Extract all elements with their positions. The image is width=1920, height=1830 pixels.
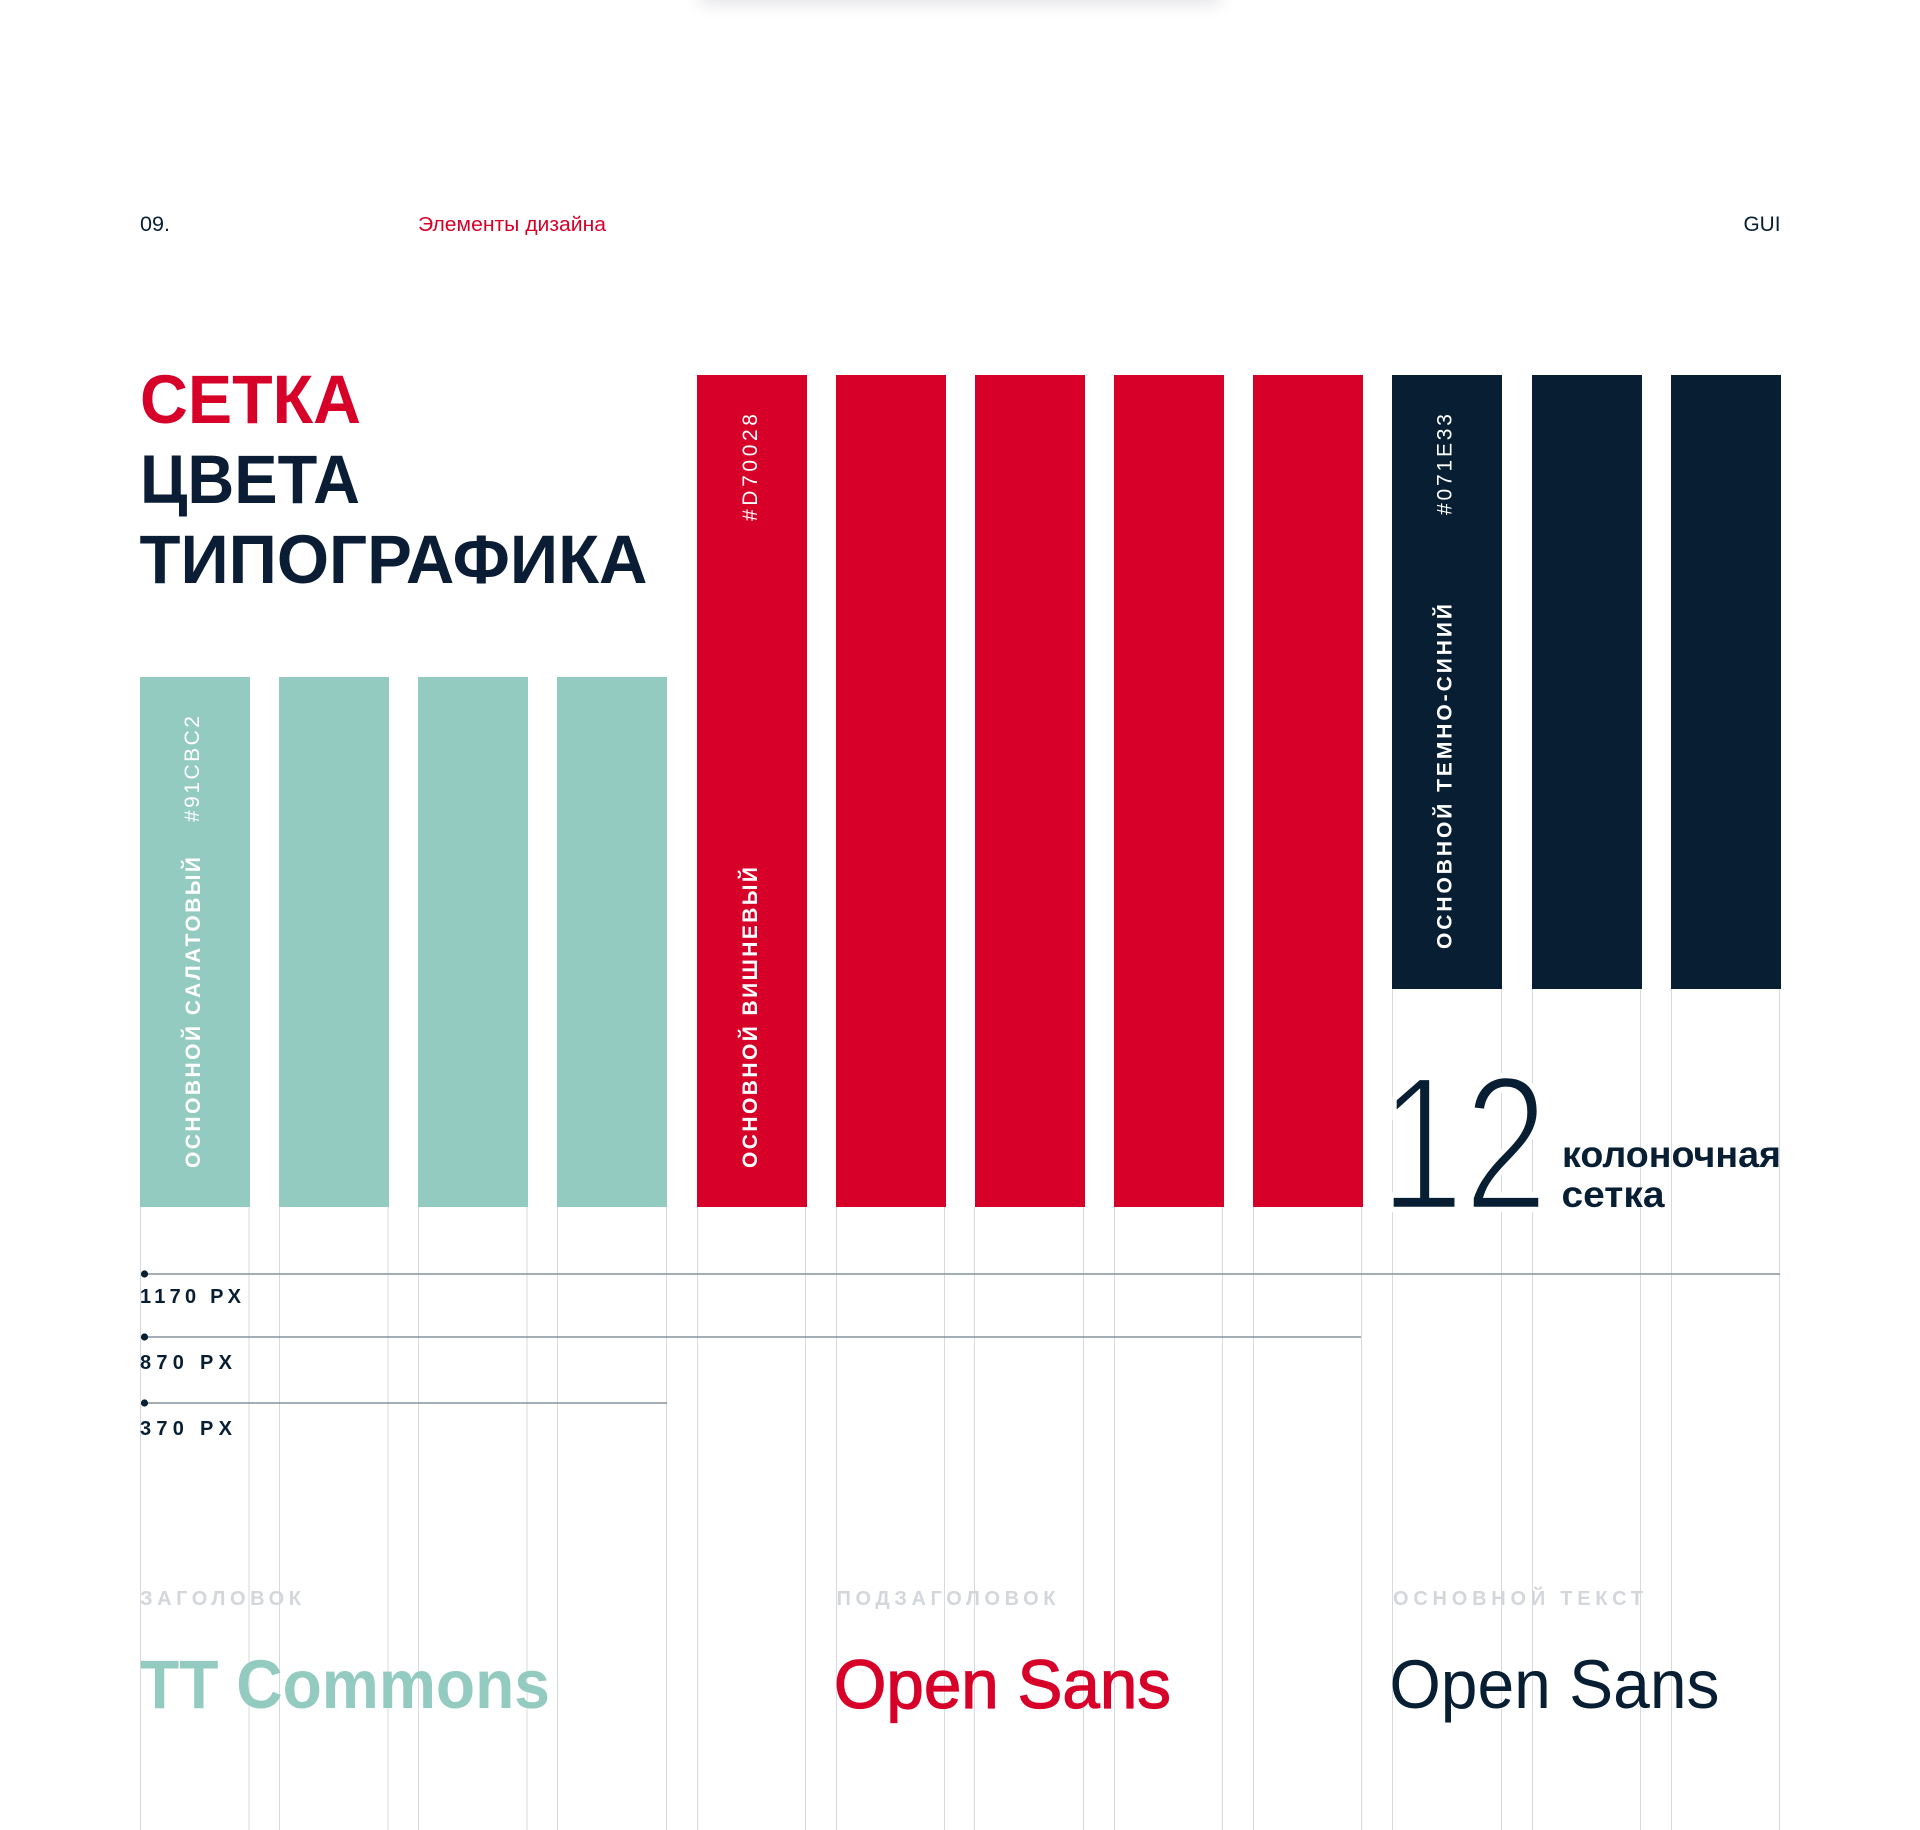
- width line: 1170 px: [140, 1270, 1780, 1308]
- typography: heading font: [140, 1588, 550, 1723]
- typography: heading font: ЗАГОЛОВОК: [140, 1588, 302, 1610]
- header: section number: 09.: [140, 213, 170, 236]
- typography: body font: Open Sans: [1390, 1646, 1720, 1723]
- typography: subheading font: ПОДЗАГОЛОВОК: [836, 1588, 1056, 1610]
- navy colour name: ОСНОВНОЙ ТЕМНО-СИНИЙ: [1432, 604, 1456, 949]
- caption: column grid: сетка: [1562, 1174, 1665, 1215]
- navy hex code: #071E33: [1434, 414, 1456, 515]
- title: СЕТКА: [140, 361, 361, 438]
- caption: column grid: колоночная: [1562, 1134, 1781, 1175]
- title: ТИПОГРАФИКА: [140, 521, 648, 598]
- typography: subheading font: [834, 1588, 1171, 1723]
- typography: heading font: TT Commons: [140, 1646, 550, 1723]
- teal colour name: ОСНОВНОЙ САЛАТОВЫЙ: [181, 857, 205, 1168]
- typography: subheading font: Open Sans: [834, 1646, 1171, 1723]
- width line: 370 px: [140, 1399, 667, 1440]
- title: [140, 361, 648, 598]
- width line: 370 px: 370 PX: [140, 1418, 233, 1440]
- width line: 870 px: [140, 1333, 1361, 1374]
- red hex code: #D70028: [739, 414, 762, 521]
- panel: navy swatch columns: [1392, 375, 1781, 989]
- title: ЦВЕТА: [140, 441, 360, 518]
- big number 12: 12: [1380, 1036, 1548, 1250]
- typography: body font: ОСНОВНОЙ ТЕКСТ: [1393, 1586, 1643, 1610]
- red colour name: ОСНОВНОЙ ВИШНЕВЫЙ: [738, 867, 762, 1168]
- width line: 870 px: 870 PX: [140, 1352, 233, 1374]
- caption: column grid: [1562, 1134, 1781, 1215]
- width line: 1170 px: 1170 PX: [140, 1286, 242, 1308]
- panel: red swatch columns: [697, 375, 1363, 1207]
- header: GUI label: GUI: [1744, 213, 1780, 236]
- typography: body font: [1390, 1586, 1720, 1723]
- header: section title: Элементы дизайна: [418, 214, 607, 236]
- panel: teal swatch columns: [140, 677, 667, 1207]
- teal hex code: #91CBC2: [181, 716, 204, 822]
- column grid lines: [140, 989, 1780, 1830]
